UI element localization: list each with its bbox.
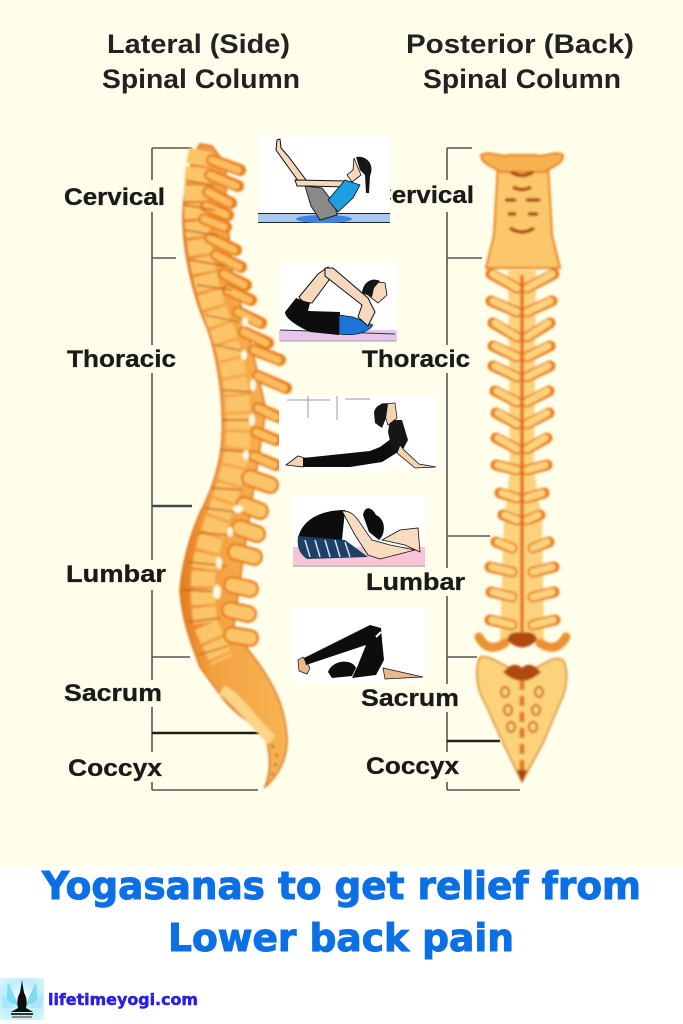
labels: lateral spine regions: Coccyx (68, 755, 163, 782)
labels: lateral spine regions: Thoracic (67, 346, 176, 373)
labels: lateral spine regions (64, 184, 176, 782)
labels: lateral spine regions: Sacrum (64, 680, 162, 707)
icon: lifetimeyogi logo (0, 978, 44, 1020)
heading: posterior spinal column: Spinal Column (423, 64, 621, 94)
pose: plough pose (293, 608, 425, 682)
heading: posterior spinal column (406, 29, 634, 94)
pose: seated forward bend (293, 495, 425, 566)
heading: lateral spinal column (102, 29, 300, 94)
website url text: lifetimeyogi.com (48, 990, 198, 1009)
labels: posterior spine regions: Coccyx (366, 753, 460, 780)
labels: posterior spine regions: Sacrum (361, 685, 459, 712)
posterior spine illustration (477, 153, 567, 782)
right region bracket (447, 148, 520, 790)
title text: Yogasanas to get relief from (41, 864, 641, 908)
heading: lateral spinal column: Spinal Column (102, 64, 300, 94)
labels: posterior spine regions: Thoracic (362, 346, 470, 373)
heading: posterior spinal column: Posterior (Back) (406, 29, 634, 59)
pose: boat pose (258, 135, 390, 223)
pose: cobra pose (279, 395, 437, 470)
labels: lateral spine regions: Cervical (64, 184, 165, 211)
left region bracket (152, 148, 270, 790)
labels: posterior spine regions: Cervical (373, 182, 474, 209)
title text: Lower back pain (168, 916, 514, 960)
pose: bow pose (279, 262, 397, 342)
labels: posterior spine regions (361, 182, 474, 780)
lateral spine illustration (180, 144, 287, 787)
labels: posterior spine regions: Lumbar (366, 569, 465, 596)
title text (41, 864, 641, 960)
heading: lateral spinal column: Lateral (Side) (107, 29, 290, 59)
labels: lateral spine regions: Lumbar (66, 561, 166, 588)
